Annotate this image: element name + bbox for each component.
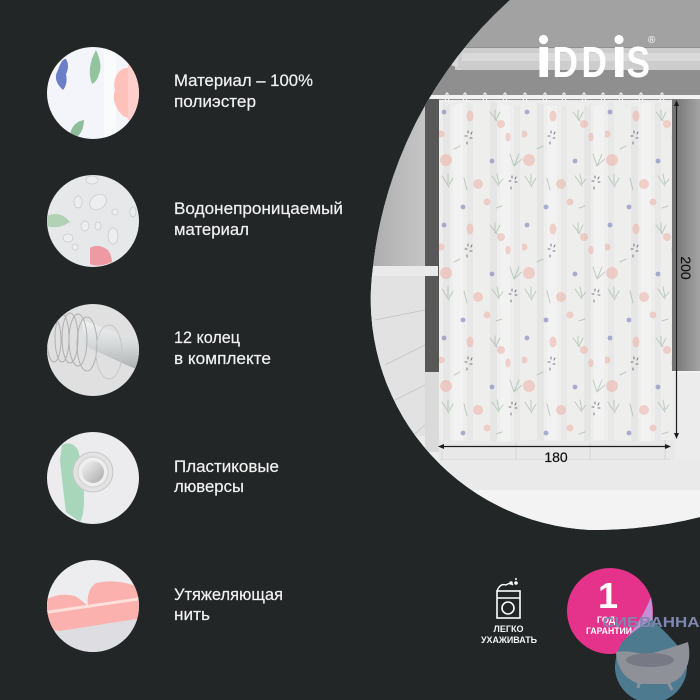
feature text: rings: 12 колец	[174, 329, 241, 347]
feature text: grommets: Пластиковые	[174, 458, 279, 476]
feature text: rings: в комплекте	[174, 350, 271, 368]
warranty badge: ГАРАНТИИ	[586, 626, 632, 636]
height label: 200	[678, 256, 694, 280]
warranty badge: ГОД	[597, 615, 616, 625]
curtain rings	[444, 92, 664, 100]
logo: IDDIS: D	[552, 38, 578, 87]
icon: water drops	[45, 173, 141, 269]
icon: curtain rings on rod	[45, 302, 142, 398]
room walls and floor	[360, 0, 700, 540]
feature text: waterproof: материал	[174, 221, 249, 239]
feature text: material	[174, 72, 313, 111]
logo: IDDIS	[536, 35, 656, 87]
panel: bathroom photo with curtain	[360, 0, 700, 540]
feature text: rings	[174, 329, 271, 368]
easy care label: ЛЕГКО	[494, 624, 523, 634]
icon: material swatch	[45, 45, 142, 141]
feature text: material: полиэстер	[174, 93, 256, 111]
feature text: weight thread: Утяжеляющая	[174, 586, 283, 604]
feature text: weight thread: нить	[174, 606, 210, 624]
feature text: grommets: люверсы	[174, 478, 244, 496]
icon: washing machine	[497, 578, 520, 618]
logo: IDDIS: I	[536, 38, 552, 87]
width dimension arrow	[438, 444, 671, 449]
width label: 180	[544, 449, 568, 465]
curtain body	[453, 440, 651, 442]
icon: plastic grommet	[45, 430, 141, 526]
feature text: grommets	[174, 458, 279, 496]
logo: IDDIS: S	[626, 38, 650, 87]
watermark: bath in water drop	[602, 597, 700, 700]
warranty badge: 1	[598, 575, 618, 616]
curtain floral print	[439, 108, 672, 438]
logo: IDDIS: ®	[648, 35, 656, 46]
feature text: material: Материал – 100%	[174, 72, 313, 90]
feature text: waterproof	[174, 200, 343, 239]
easy care label: УХАЖИВАТЬ	[481, 635, 538, 645]
feature text: weight thread	[174, 586, 283, 624]
warranty badge	[567, 568, 653, 654]
feature text: waterproof: Водонепроницаемый	[174, 200, 343, 218]
height dimension arrow	[674, 100, 679, 439]
icon: weighted thread	[47, 560, 139, 652]
logo: IDDIS: I	[611, 38, 628, 87]
watermark: bath in water drop: СИБВАННА	[602, 615, 700, 631]
logo: IDDIS: D	[582, 38, 607, 87]
easy care label	[481, 624, 538, 645]
shower rod	[427, 95, 700, 99]
